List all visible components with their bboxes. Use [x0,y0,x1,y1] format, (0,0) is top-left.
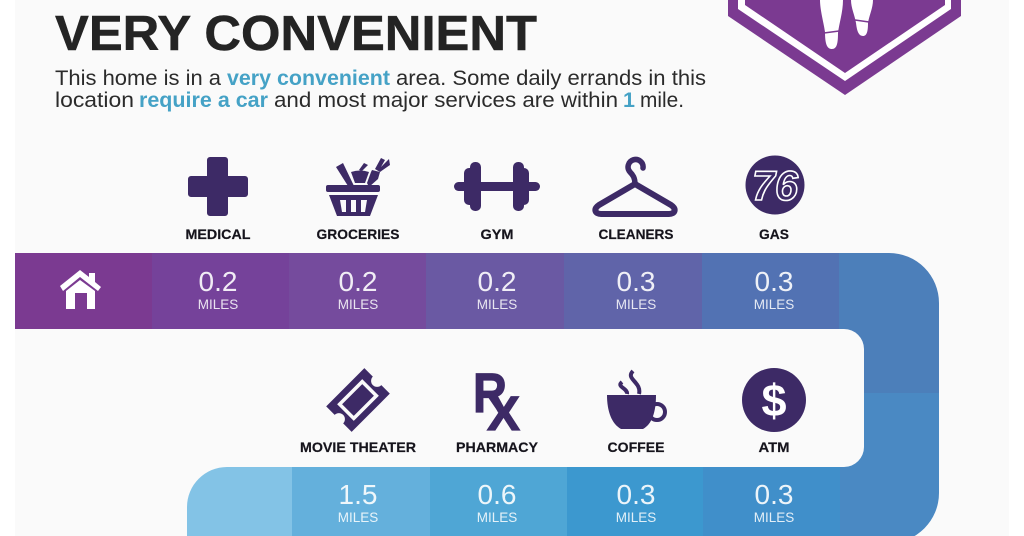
icon: gym dumbbell [454,162,540,211]
icon: pharmacy rx [473,361,520,441]
description text: mile. [640,88,684,112]
description text: very convenient [227,66,390,90]
values: top row: MILES [754,297,794,312]
badge: walking footprints [728,0,961,95]
values: top row: MILES [616,297,656,312]
values: top row: MILES [198,297,238,312]
icon: gas 76 [746,156,804,214]
title: VERY CONVENIENT [55,7,537,61]
icon: home [60,270,101,309]
values: top row: 0.3 [617,266,655,297]
values: top row: MILES [338,297,378,312]
label: cleaners: CLEANERS [598,226,674,242]
icon: gas 76: 76 [752,162,799,209]
icon: groceries basket [326,158,390,216]
values: top row [198,266,794,312]
values: top row: 0.2 [199,266,237,297]
icon: atm dollar: $ [761,375,787,426]
description text: 1 [623,88,635,112]
description text: This home is in a [55,66,221,90]
icon: pharmacy rx: X [487,388,520,441]
values: bottom row: 0.3 [617,479,655,510]
label: groceries: GROCERIES [316,226,400,242]
label: pharmacy: PHARMACY [456,439,539,455]
values: bottom row: 1.5 [339,479,377,510]
description text [55,66,706,112]
label: movie theater: MOVIE THEATER [300,439,416,455]
values: bottom row: MILES [754,510,794,525]
label: gym: GYM [480,226,514,242]
values: top row: 0.3 [755,266,793,297]
values: bottom row [338,479,794,525]
icon: atm dollar [742,368,806,432]
icon: medical cross [188,157,248,216]
label: medical: MEDICAL [186,226,251,242]
icon: movie ticket [326,368,390,432]
label: coffee: COFFEE [608,439,664,455]
icon: coffee cup [607,371,665,429]
values: bottom row: 0.3 [755,479,793,510]
values: top row: MILES [477,297,517,312]
route band [15,253,939,536]
values: top row: 0.2 [478,266,516,297]
label: atm: ATM [758,439,790,455]
label: gas: GAS [759,226,789,242]
icon: cleaners hanger [595,159,675,214]
values: bottom row: MILES [477,510,517,525]
values: top row: 0.2 [339,266,377,297]
icon: pharmacy rx: R [473,361,507,424]
description text: area. Some daily errands in this [396,66,706,90]
values: bottom row: MILES [616,510,656,525]
values: bottom row: 0.6 [478,479,516,510]
description text: location [55,88,134,112]
values: bottom row: MILES [338,510,378,525]
description text: require a car [139,88,269,112]
segment: home [15,253,153,329]
description text: and most major services are within [274,88,618,112]
